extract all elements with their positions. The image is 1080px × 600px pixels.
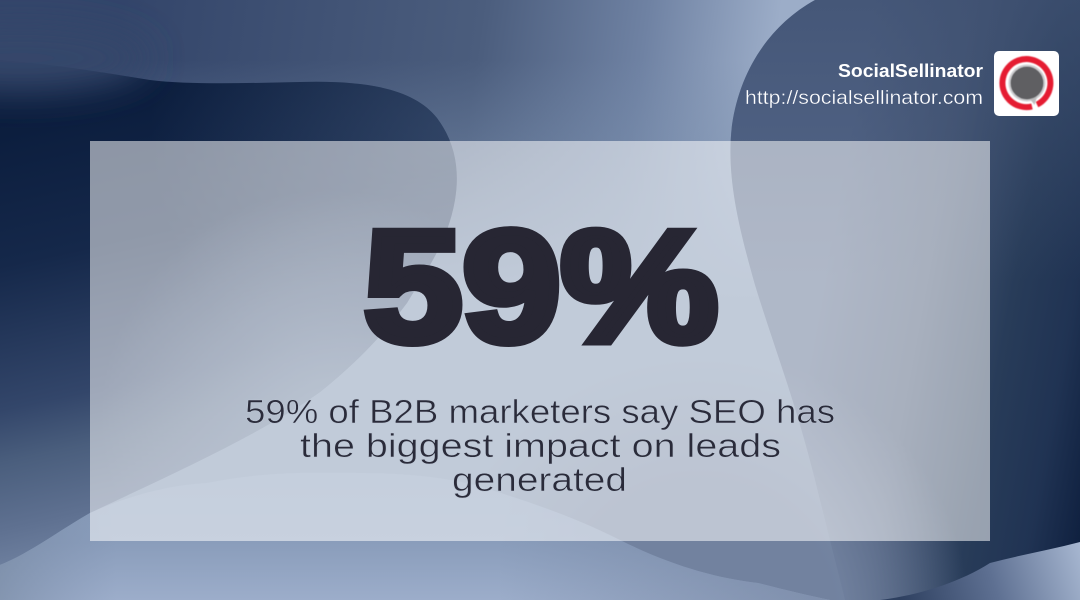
brand URL: http://socialsellinator.com <box>745 88 983 109</box>
description text: the biggest impact on leads <box>300 427 781 464</box>
big statistic: 59% <box>364 199 718 375</box>
panel: translucent card <box>90 141 990 541</box>
icon: SocialSellinator logo <box>994 51 1059 116</box>
brand name: SocialSellinator <box>838 61 983 81</box>
description text <box>245 393 835 498</box>
description text: generated <box>452 461 627 498</box>
description text: 59% of B2B marketers say SEO has <box>245 393 835 430</box>
